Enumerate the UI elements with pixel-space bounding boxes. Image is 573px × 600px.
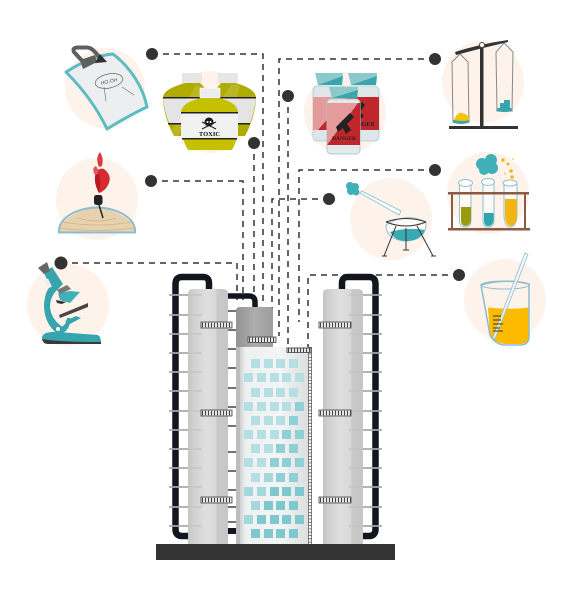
ladder xyxy=(308,347,312,544)
icon: toxic bottles xyxy=(163,71,256,153)
icon: round flask on tripod xyxy=(346,178,436,260)
icon: flame on burner xyxy=(56,152,138,240)
base slab xyxy=(156,544,395,560)
connector dots xyxy=(54,48,465,281)
rungs xyxy=(169,295,382,526)
connector lines xyxy=(61,54,459,348)
icon: beaker with rod xyxy=(464,253,546,345)
building xyxy=(236,347,240,544)
windows xyxy=(244,359,304,538)
icon: clipboard xyxy=(65,48,147,129)
refinery tower complex xyxy=(156,277,395,560)
icon: danger bottles: DANGER xyxy=(332,136,357,142)
icon: toxic bottles: TOXIC xyxy=(199,131,220,138)
column: left xyxy=(188,289,228,544)
column rung ticks xyxy=(189,295,362,526)
icon: danger bottles: NGER xyxy=(357,122,375,128)
icon: danger bottles xyxy=(304,72,386,154)
pipes xyxy=(176,277,376,536)
platforms xyxy=(201,322,351,503)
column: middle xyxy=(236,307,273,350)
icon: clipboard: HO-OH xyxy=(100,77,118,87)
icon: balance scale xyxy=(442,40,524,129)
icon: microscope xyxy=(27,262,109,346)
column: right xyxy=(323,289,363,544)
icon: test tubes on rack xyxy=(447,152,530,234)
